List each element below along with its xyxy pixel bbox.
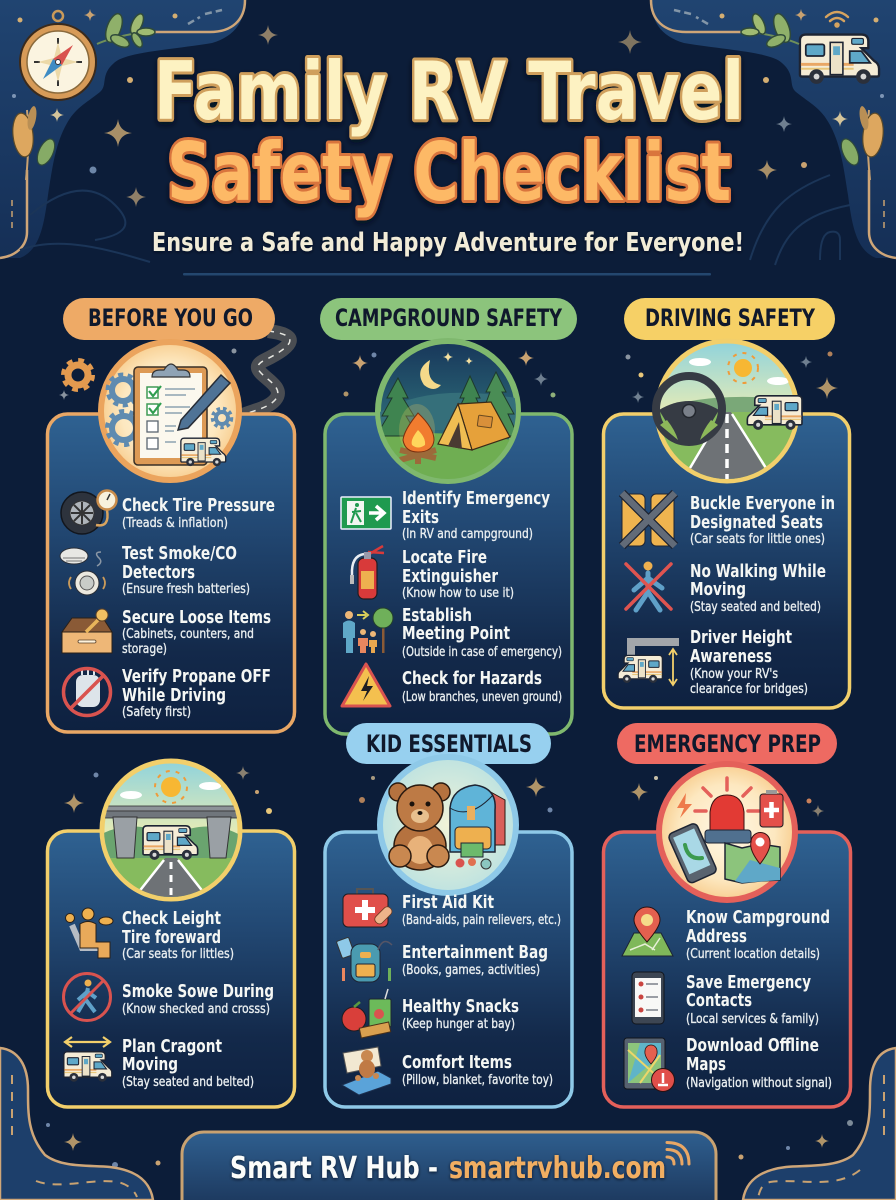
item: no walking while moving: No Walking While	[690, 562, 826, 582]
icon: tire	[61, 490, 116, 534]
item: secure loose items: Secure Loose Items	[122, 608, 271, 628]
corner decoration: bottom right	[743, 1048, 896, 1200]
item: establish meeting point: (Outside in case of emergency)	[402, 645, 562, 660]
heading pill: BEFORE YOU GO	[88, 304, 253, 332]
panel box	[48, 414, 294, 732]
item: establish meeting point: Establish	[402, 606, 472, 626]
item: first aid kit: (Band-aids, pain relievers, etc.)	[402, 913, 561, 928]
item: test smoke detectors: Detectors	[122, 563, 195, 583]
panel: bridge clearance	[48, 761, 294, 1107]
heading pill	[346, 723, 551, 764]
item: test smoke detectors: (Ensure fresh batteries)	[122, 582, 250, 597]
panel box	[604, 414, 850, 708]
item: know campground address: (Current location details)	[686, 947, 820, 962]
item: plan cragont: Plan Cragont	[122, 1037, 222, 1057]
item: identify emergency exits: Exits	[402, 508, 439, 528]
item: smoke sowe during: Smoke Sowe During	[122, 982, 274, 1002]
item: check for hazards: Check for Hazards	[402, 669, 542, 689]
item: entertainment bag: (Books, games, activities)	[402, 963, 540, 978]
item: buckle everyone: Designated Seats	[690, 513, 823, 533]
icon: fire extinguisher	[350, 546, 384, 599]
icon: RV under bridge	[618, 638, 679, 685]
heading pill: KID ESSENTIALS	[366, 730, 532, 758]
item: check leight: (Car seats for littles)	[122, 947, 234, 962]
title	[154, 45, 744, 219]
footer	[182, 1132, 716, 1200]
item: secure loose items: (Cabinets, counters, and	[122, 627, 254, 642]
panel: before you go	[48, 298, 294, 732]
stars: header	[50, 9, 848, 207]
footer text: smartrvhub.com	[449, 1151, 666, 1186]
icon: activity backpack	[336, 937, 392, 982]
item: know campground address: Address	[686, 927, 747, 947]
title: Family RV Travel	[154, 45, 744, 138]
item: comfort items	[342, 1047, 553, 1095]
icon: compass	[20, 11, 96, 100]
item: secure loose items: storage)	[122, 642, 167, 657]
item: check tire pressure: Check Tire Pressure	[122, 496, 275, 516]
item: buckle everyone: (Car seats for little ones)	[690, 532, 825, 547]
item: locate fire extinguisher: Extinguisher	[402, 567, 498, 587]
icon: no walking	[626, 562, 671, 610]
item: smoke sowe during: (Know shecked and crosss)	[122, 1002, 270, 1017]
icon: leaves top right	[741, 12, 799, 50]
corner decoration: top left	[0, 0, 245, 258]
footer text	[230, 1151, 666, 1186]
item: verify propane off	[64, 667, 271, 720]
item: no walking while moving	[626, 562, 826, 615]
heading pill: EMERGENCY PREP	[634, 730, 821, 758]
heading pill	[63, 298, 275, 340]
panel: kid essentials	[325, 723, 572, 1107]
item: check for hazards: (Low branches, uneven ground)	[402, 690, 562, 705]
divider	[183, 273, 711, 276]
road	[240, 331, 290, 416]
item: identify emergency exits: (In RV and campground)	[402, 527, 533, 542]
item: plan cragont	[64, 1037, 254, 1090]
item: check leight	[66, 908, 234, 962]
item: verify propane off: Verify Propane OFF	[122, 667, 271, 687]
item: establish meeting point: Meeting Point	[402, 624, 510, 644]
footer text: Smart RV Hub -	[230, 1151, 438, 1186]
icon: map pin	[622, 907, 673, 956]
item: healthy snacks: (Keep hunger at bay)	[402, 1017, 515, 1032]
panel box	[325, 414, 572, 734]
badge: RV under overpass	[100, 761, 242, 899]
item: download offline maps: Maps	[686, 1055, 726, 1075]
icon: child seat	[66, 908, 113, 958]
icon: hazard triangle	[342, 664, 390, 706]
item: know campground address	[622, 907, 830, 962]
item: identify emergency exits	[341, 489, 550, 542]
icon: leaves top left	[97, 12, 155, 50]
item: establish meeting point	[343, 606, 562, 660]
item: first aid kit: First Aid Kit	[402, 893, 494, 913]
icon: pillow and teddy	[342, 1047, 391, 1095]
item: download offline maps: (Navigation without signal)	[686, 1076, 832, 1091]
item: verify propane off: (Safety first)	[122, 705, 191, 720]
item: driver height awareness: Driver Height	[690, 628, 792, 648]
item: know campground address: Know Campground	[686, 908, 830, 928]
item: entertainment bag	[336, 937, 548, 982]
badge: steering wheel and road	[655, 341, 802, 482]
item: locate fire extinguisher: Locate Fire	[402, 548, 487, 568]
panel box	[48, 831, 294, 1107]
item: buckle everyone	[622, 493, 835, 547]
heading pill	[624, 298, 835, 340]
item: comfort items: Comfort Items	[402, 1053, 512, 1073]
item: test smoke detectors	[60, 544, 250, 597]
item: identify emergency exits: Identify Emergency	[402, 489, 550, 509]
icon: family at tree	[343, 608, 393, 653]
faint landscape lines behind title	[20, 175, 850, 265]
item: healthy snacks: Healthy Snacks	[402, 997, 519, 1017]
item: plan cragont: Moving	[122, 1055, 178, 1075]
item: test smoke detectors: Test Smoke/CO	[122, 544, 237, 564]
icon: no crossing	[64, 974, 110, 1020]
heading pill	[617, 723, 837, 764]
item: save emergency contacts	[632, 972, 819, 1027]
item: comfort items: (Pillow, blanket, favorite toy)	[402, 1073, 553, 1088]
item: check tire pressure: (Treads & inflation)	[122, 516, 228, 531]
item: verify propane off: While Driving	[122, 686, 226, 706]
item: save emergency contacts: Save Emergency	[686, 973, 811, 993]
heading pill: DRIVING SAFETY	[645, 304, 815, 332]
item: driver height awareness: (Know your RV's	[690, 667, 778, 682]
item: driver height awareness: Awareness	[690, 647, 772, 667]
icon: leaves right	[838, 105, 885, 180]
item: check leight: Tire foreward	[122, 928, 221, 948]
badge: clipboard	[101, 342, 239, 480]
panel box	[604, 832, 850, 1107]
stars: around panels	[46, 348, 853, 1168]
icon: RV width	[64, 1037, 112, 1082]
icon: tablet map	[624, 1038, 674, 1092]
item: smoke sowe during	[64, 974, 274, 1020]
icon: wifi top right	[826, 12, 848, 26]
item: first aid kit	[343, 889, 561, 928]
badge: siren, phone, map	[659, 764, 795, 900]
item: plan cragont: (Stay seated and belted)	[122, 1075, 254, 1090]
item: buckle everyone: Buckle Everyone in	[690, 494, 835, 514]
badge: teddy bear and backpack	[380, 757, 516, 893]
icon: phone contacts	[632, 972, 664, 1024]
item: driver height awareness: clearance for bridges)	[690, 682, 808, 697]
icon: seat belts	[622, 493, 675, 546]
icon: gear orange	[64, 360, 92, 390]
icon: wifi signal	[667, 1142, 689, 1164]
item: driver height awareness	[618, 628, 808, 697]
heading pill: CAMPGROUND SAFETY	[335, 304, 562, 332]
corner decoration: bottom left	[0, 1048, 153, 1200]
subtitle: Ensure a Safe and Happy Adventure for Everyone!	[152, 228, 744, 258]
item: healthy snacks	[342, 989, 519, 1038]
icon: apple, juice, snack bar	[342, 989, 391, 1038]
icon: smoke detector	[60, 548, 105, 595]
corner decoration: top right	[651, 0, 896, 258]
item: check tire pressure	[61, 490, 275, 534]
badge: campfire and tent	[375, 341, 525, 490]
item: secure loose items	[62, 608, 271, 657]
panel: driving safety	[604, 298, 850, 708]
item: locate fire extinguisher	[350, 546, 514, 601]
item: check leight: Check Leight	[122, 909, 221, 929]
panel: emergency prep	[604, 723, 850, 1107]
item: entertainment bag: Entertainment Bag	[402, 943, 548, 963]
icon: leaves left	[11, 105, 58, 180]
heading pill	[320, 298, 577, 340]
item: no walking while moving: Moving	[690, 580, 746, 600]
item: save emergency contacts: Contacts	[686, 991, 752, 1011]
icon: drawer and key	[62, 609, 112, 653]
item: check for hazards	[342, 664, 562, 706]
item: download offline maps: Download Offline	[686, 1036, 819, 1056]
icon: exit sign	[341, 497, 391, 529]
panel box	[325, 832, 572, 1107]
item: download offline maps	[624, 1036, 832, 1092]
icon: first aid kit	[343, 889, 394, 927]
title: Safety Checklist	[167, 126, 731, 219]
item: locate fire extinguisher: (Know how to use it)	[402, 586, 514, 601]
item: save emergency contacts: (Local services & family)	[686, 1012, 819, 1027]
icon: no propane	[64, 668, 110, 716]
item: no walking while moving: (Stay seated and belted)	[690, 600, 821, 615]
icon: RV top right	[800, 35, 879, 84]
panel: campground safety	[320, 298, 577, 734]
